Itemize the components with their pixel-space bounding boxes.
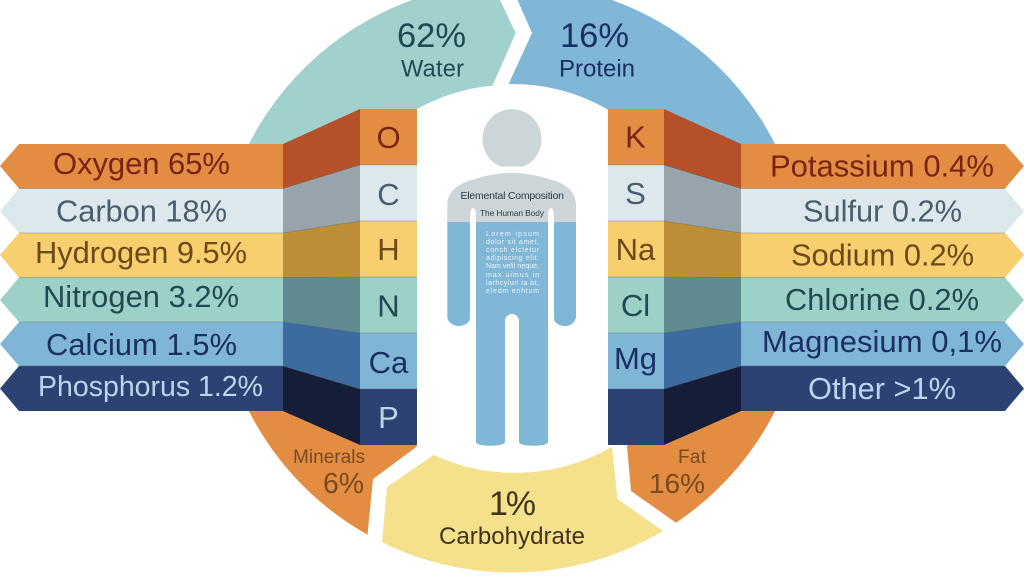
text block: lorem ipsum: max uimus in [486,272,539,279]
icon: torso upper gray [447,173,576,222]
right element symbols column: Cl [621,288,650,323]
right element symbols column: Mg [614,341,657,376]
banner: calcium: Calcium 1.5% [46,327,237,362]
banner: sodium: Sodium 0.2% [791,238,974,273]
text block: lorem ipsum: Nam velit neque, [486,263,539,270]
right element symbols column: Na [616,232,656,267]
banner: other: Other >1% [808,371,956,406]
segment: protein 16%: Protein [559,56,635,83]
banner: magnesium [741,322,1024,366]
text block: lorem ipsum: consh elctetur [486,247,540,254]
banner: calcium [0,322,283,366]
banner: chlorine [741,278,1024,322]
banner: potassium [741,144,1024,188]
right element symbols column: K [625,120,646,155]
banner: sulfur: Sulfur 0.2% [803,194,962,229]
banner: potassium: Potassium 0.4% [770,149,994,184]
segment: fat 16% [627,400,780,523]
banner: oxygen: Oxygen 65% [53,146,230,181]
banner: other [741,366,1024,411]
right connector slants [664,109,741,445]
left connector slants [283,109,360,445]
segment: fat 16%: Fat [678,447,707,468]
left element symbols column: O [376,120,401,155]
left element banners [0,144,283,411]
segment: water 62% [237,0,516,240]
banner: magnesium: Magnesium 0,1% [762,324,1002,359]
icon: head [482,109,542,166]
banner: oxygen [0,144,283,188]
banner: hydrogen [0,233,283,278]
banner: phosphorus [0,366,283,411]
segment: minerals 6% [244,400,418,535]
left element symbols column: Ca [369,345,409,380]
icon: body lower blue [447,222,576,446]
text block: lorem ipsum [486,231,540,295]
banner: carbon: Carbon 18% [56,194,227,229]
human body figure [447,109,576,446]
right element banners [741,144,1024,411]
banner: sodium [741,233,1024,278]
banner: chlorine: Chlorine 0.2% [785,282,979,317]
right element symbols column [608,109,664,445]
segment: carbohydrate 1%: 1% [489,485,536,523]
text block: lorem ipsum: adipiscing elit. [486,255,539,262]
segment: fat 16%: 16% [649,468,705,499]
segment: carbohydrate 1% [382,447,663,572]
subheading: the human body: The Human Body [480,208,545,218]
text block: lorem ipsum: larhcylun ia at, [486,280,539,287]
left element symbols column: N [377,288,400,324]
left element symbols column: H [377,232,400,267]
segment: minerals 6%: 6% [323,468,364,500]
banner: hydrogen: Hydrogen 9.5% [35,235,247,270]
left element symbols column: P [378,400,399,435]
segment: minerals 6%: Minerals [293,447,365,468]
segment: water 62%: 62% [397,17,466,55]
segment: water 62%: Water [401,57,464,83]
segment: protein 16% [509,0,787,240]
text block: lorem ipsum: eledm enhtum [486,288,539,295]
banner: carbon [0,188,283,233]
left element symbols column: C [377,177,400,212]
heading: elemental composition: Elemental Composition [460,190,564,202]
right element symbols column: S [625,176,646,211]
segment: protein 16%: 16% [560,17,629,55]
text block: lorem ipsum: Lorem ipsum [486,231,539,238]
banner: nitrogen: Nitrogen 3.2% [43,279,239,314]
left element symbols column [360,109,417,445]
banner: nitrogen [0,278,283,322]
text block: lorem ipsum: dolor sit amet, [486,239,539,246]
banner: phosphorus: Phosphorus 1.2% [38,371,263,403]
segment: carbohydrate 1%: Carbohydrate [439,523,585,550]
banner: sulfur [741,188,1024,233]
